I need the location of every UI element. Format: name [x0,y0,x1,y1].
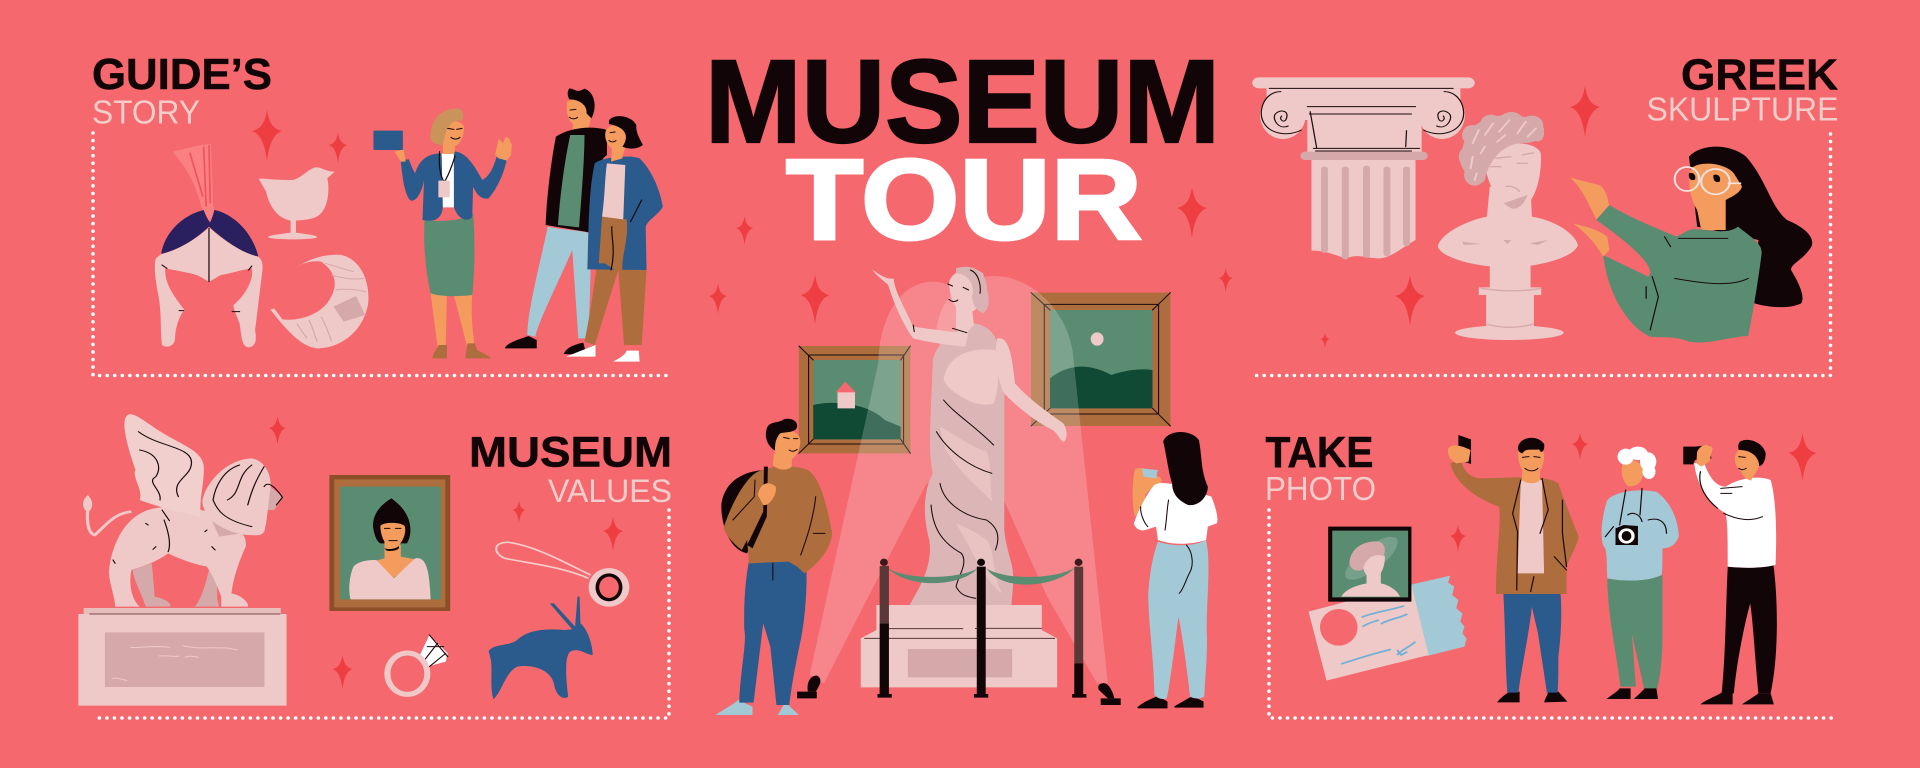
icon: ticket [1309,576,1467,681]
framed bust photo [1328,527,1411,602]
icon: blue bull figurine [489,597,593,699]
spotlight lamps [797,676,1121,705]
panel: greek sculpture [1252,50,1838,376]
heading: guide's story: GUIDE’S [92,50,272,99]
heading: greek sculpture [1646,50,1838,128]
icons and people: guide's story [155,88,663,362]
dotted frame: museum values [99,510,669,718]
icon: bird goblet [259,167,335,239]
classical marble bust [1438,112,1578,340]
icon: amulet pendant [496,542,629,607]
heading: guide's story: STORY [92,94,200,130]
rope barrier [877,559,1086,698]
figure: woman with phone [1133,432,1217,708]
stepped pedestal [861,605,1057,687]
icon: diamond ring [387,635,448,694]
heading: greek sculpture: GREEK [1681,50,1838,100]
figure: woman pointing [1570,147,1812,342]
figure: man with backpack [716,419,832,715]
heading: greek sculpture: SKULPTURE [1646,90,1838,128]
main title: TOUR [786,137,1142,264]
sparkle stars [252,86,1816,689]
spotlight beams [810,276,1108,683]
ionic column fragment [1252,77,1475,258]
figure: tourist woman [566,116,663,362]
heading: take photo: TAKE [1266,428,1374,477]
framed painting: landscape with moon [1031,293,1170,426]
panel: museum values [78,414,672,718]
heading: guide's story [92,50,272,130]
figure: older woman with camera [1602,447,1679,699]
figure: tourist man [505,88,607,355]
sculptures and pointing woman [1252,77,1812,342]
dotted frame: guide's story [93,133,669,376]
panel: central museum scene [705,36,1220,715]
gallery scene [716,267,1217,715]
icon: helmet [155,144,263,347]
artifacts: museum values [78,414,629,706]
heading: take photo [1265,428,1376,507]
panel: guide's story [92,50,669,376]
panel: take photo [1265,428,1838,718]
venus statue [872,267,1067,605]
icon: crescent necklace [270,255,368,348]
figure: guide woman [373,109,512,358]
main title [705,36,1220,264]
figure: man photographing [1683,440,1777,704]
heading: museum values [469,428,672,509]
heading: museum values: MUSEUM [469,428,672,476]
photo items and people [1309,435,1777,704]
main title: MUSEUM [705,36,1220,168]
dotted frame: greek sculpture [1256,134,1830,376]
heading: take photo: PHOTO [1265,470,1376,507]
dotted frame: take photo [1269,510,1838,718]
framed portrait [329,475,450,611]
figure: man taking selfie [1448,435,1579,702]
heading: museum values: VALUES [548,473,672,509]
framed painting: house on hill [799,346,910,453]
winged lion statue [78,414,287,706]
